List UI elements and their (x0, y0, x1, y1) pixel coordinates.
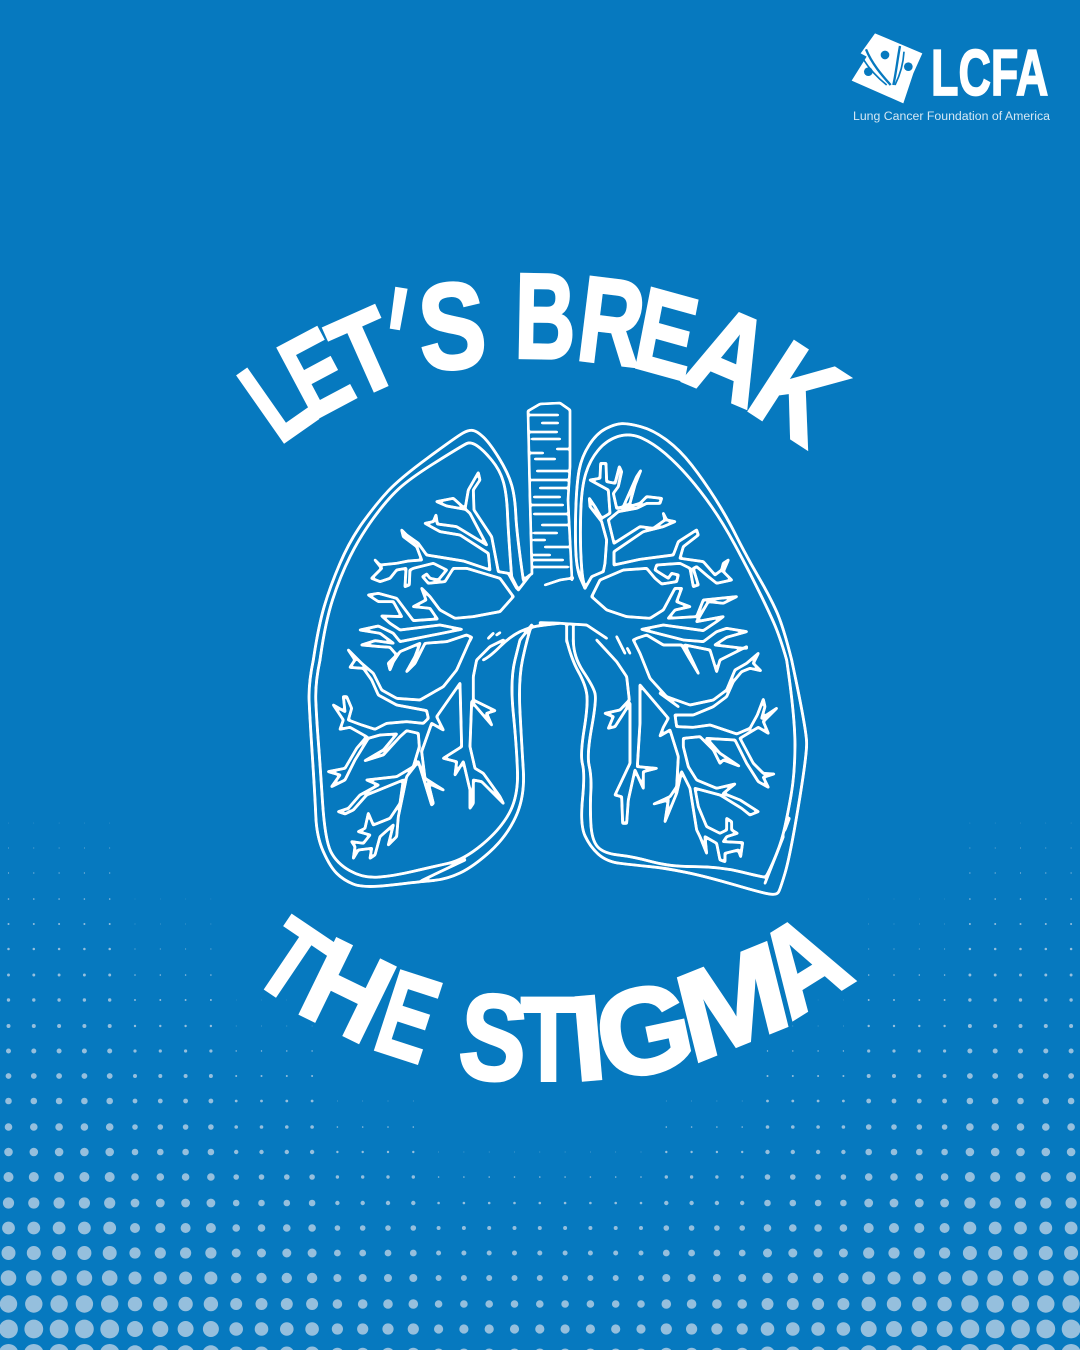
right lung lower border (567, 640, 807, 894)
logo tagline: Lung Cancer Foundation of America (853, 111, 1051, 123)
headline: THE STIGMA: T (521, 973, 576, 1107)
headline: LET'S BREAK: A (670, 279, 792, 433)
headline: LET'S BREAK: S (414, 255, 490, 397)
trachea (528, 403, 573, 585)
headline: THE STIGMA: H (282, 912, 413, 1069)
headline: LET'S BREAK (219, 249, 866, 470)
headline: THE STIGMA (235, 887, 871, 1109)
headline: THE STIGMA: M (664, 915, 801, 1091)
headline: LET'S BREAK: E (626, 262, 707, 406)
headline: LET'S BREAK: L (219, 331, 334, 466)
headline: THE STIGMA: S (454, 967, 533, 1109)
right lung upper bronchi (589, 463, 747, 648)
headline: LET'S BREAK: R (571, 251, 652, 393)
icon: LCFA ribbon mark (852, 33, 922, 103)
headline: THE STIGMA: I (566, 970, 611, 1107)
headline: LET'S BREAK: E (262, 304, 371, 444)
right lung upper half (540, 424, 792, 660)
left lung upper bronchi (372, 473, 517, 597)
headline: LET'S BREAK: T (313, 284, 417, 423)
left lung border lines (313, 430, 560, 660)
headline: THE STIGMA: G (584, 955, 705, 1107)
left lung middle bronchi (360, 588, 513, 672)
LCFA logo (852, 33, 1051, 123)
headline: THE STIGMA: T (235, 896, 348, 1028)
lungs illustration (309, 403, 807, 894)
headline: LET'S BREAK: K (729, 316, 866, 470)
left lung lower border (309, 625, 532, 886)
headline: LET'S BREAK: ' (370, 255, 415, 428)
headline: THE STIGMA: E (362, 945, 454, 1089)
halftone dot pattern (8, 823, 1071, 1350)
left lung lower bronchi (328, 640, 503, 858)
right lung border lines (540, 424, 792, 660)
right lung lower bronchi (597, 635, 777, 862)
left lung lower half (309, 625, 532, 886)
headline: THE STIGMA: A (733, 887, 871, 1043)
headline: LET'S BREAK: B (514, 249, 577, 385)
logo wordmark: LCFA (931, 37, 1048, 109)
right lung lower half (567, 635, 807, 894)
left lung upper half (313, 430, 560, 672)
